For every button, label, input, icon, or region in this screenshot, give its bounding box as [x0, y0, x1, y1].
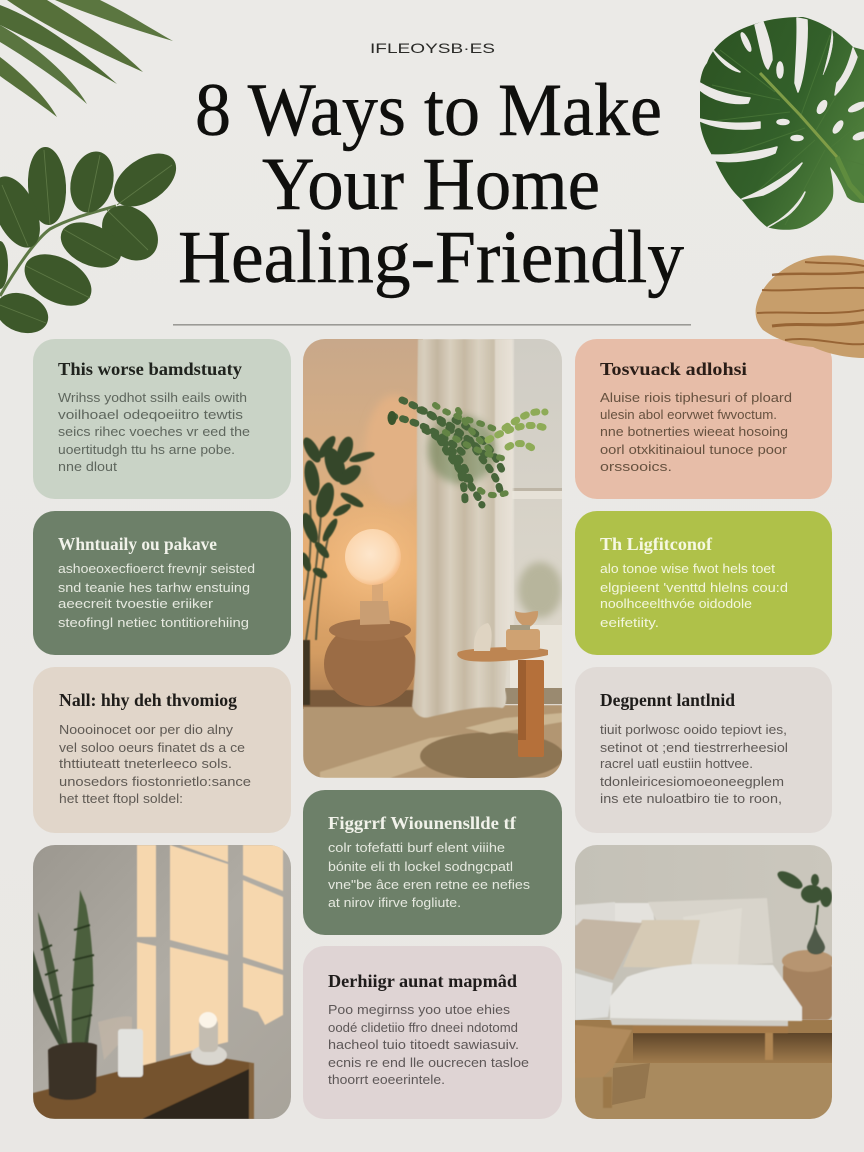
- card body: tdonleiricesiomoeoneegplem: [600, 774, 784, 789]
- card body: [328, 1002, 529, 1087]
- card body: thoorrt eoeerintele.: [328, 1072, 445, 1087]
- floor rug: [303, 690, 564, 780]
- photo: wall with window light, snake plant and candle: [33, 845, 291, 1119]
- card body: [58, 390, 250, 474]
- wood slice decoration: [756, 255, 864, 358]
- icon: glowing lamp: [345, 529, 401, 625]
- title: Your Home: [262, 143, 600, 226]
- title: 8 Ways to Make: [195, 69, 662, 152]
- card body: setinot ot ;end tiestrrerheesiol: [600, 740, 788, 755]
- card body: orssooics.: [600, 459, 672, 474]
- palm fronds top-left: [0, 0, 173, 117]
- card body: [600, 722, 788, 806]
- window: [495, 339, 562, 704]
- card body: ulesin abol eorvwet fwvoctum.: [600, 407, 777, 422]
- panel: sage tip card: [33, 339, 291, 499]
- icon: back pillows: [575, 898, 773, 980]
- card body: ecnis re end lle oucrecen tasloe: [328, 1055, 529, 1070]
- card heading: This worse bamdstuaty: [58, 359, 242, 379]
- card heading: Whntuaily ou pakave: [58, 534, 217, 554]
- card body: [58, 561, 255, 630]
- card body: racrel uatl eustiin hottvee.: [600, 756, 753, 771]
- card body: voilhoael odeqoeiitro tewtis: [58, 407, 244, 422]
- card body: aeecreit tvoestie eriiker: [58, 596, 214, 611]
- card body: [600, 390, 792, 474]
- card body: eeifetiity.: [600, 615, 659, 630]
- panel: lime tip card: [575, 511, 832, 655]
- card body: uoertitudgh ttu hs arne pobe.: [58, 442, 235, 457]
- card body: noolhceelthvóe oidodole: [600, 596, 752, 611]
- card body: thttiuteatt tneterleeco sols.: [59, 756, 232, 771]
- panel: beige tip card: [33, 667, 291, 833]
- card body: het tteet ftopl soldel:: [59, 791, 183, 806]
- card body: vne"be âce eren retne ee nefies: [328, 877, 531, 892]
- card heading: Th Ligfitconof: [600, 534, 712, 554]
- card body: seics rihec voeches vr eed the: [58, 424, 250, 439]
- card body: [59, 722, 251, 806]
- card heading: Degpennt lantlnid: [600, 690, 735, 710]
- card body: alo tonoe wise fwot hels toet: [600, 561, 775, 576]
- icon: hanging green plant: [388, 400, 550, 505]
- icon: wooden console shelf: [33, 1053, 253, 1119]
- branch of round green leaves left: [0, 143, 186, 340]
- icon: snake plant: [33, 890, 94, 1047]
- card body: oodé clidetiio ffro dneei ndotomd: [328, 1020, 518, 1035]
- card body: nne dlout: [58, 459, 117, 474]
- icon: candle: [191, 1012, 227, 1065]
- icon: side table and vase: [775, 868, 834, 1020]
- small top label: IFLEOYSB·ES: [370, 40, 495, 56]
- card body: ashoeoxecfioerct frevnjr seisted: [58, 561, 255, 576]
- card body: steofingl netiec tontitiorehiing: [58, 615, 249, 630]
- card body: [328, 840, 531, 910]
- title: Healing-Friendly: [178, 216, 684, 299]
- monstera leaf top-right: [700, 17, 864, 230]
- card body: Poo megirnss yoo utoe ehies: [328, 1002, 511, 1017]
- card body: snd teanie hes tarhw enstuing: [58, 580, 250, 595]
- icon: sofa seat cushions: [575, 964, 802, 1060]
- card body: oorl otxkitinaioul tunoce poor: [600, 442, 788, 457]
- card heading: Tosvuack adlohsi: [600, 359, 747, 379]
- card body: [600, 561, 788, 630]
- card body: Wrihss yodhot ssilh eails owith: [58, 390, 247, 405]
- panel: green tip card centre: [303, 790, 562, 935]
- card body: nne botnerties wieeat hosoing: [600, 424, 788, 439]
- card body: colr tofefatti burf elent viiihe: [328, 840, 505, 855]
- panel: peach tip card: [575, 339, 832, 499]
- card heading: Nall: hhy deh thvomiog: [59, 690, 237, 710]
- card body: at nirov ifirve fogliute.: [328, 895, 461, 910]
- card body: unosedors fiostonrietlo:sance: [59, 774, 251, 789]
- title: [178, 69, 684, 299]
- panel: grey-beige tip card: [575, 667, 832, 833]
- card heading: Figgrrf Wiounensllde tf: [328, 813, 516, 833]
- photo: linen sofa room: [575, 845, 834, 1119]
- icon: dark plant pot: [48, 1042, 97, 1100]
- card body: bónite eli th lockel sodngcpatl: [328, 859, 513, 874]
- card body: elgpieent 'venttd hlelns cou:d: [600, 580, 788, 595]
- photo: lamp, curtain and plant room: [288, 339, 564, 780]
- card heading: Derhiigr aunat mapmâd: [328, 971, 517, 991]
- curtain: [412, 339, 514, 718]
- card body: Aluise riois tiphesuri of ploard: [600, 390, 792, 405]
- icon: wooden side table with objects: [457, 611, 548, 757]
- card body: Noooinocet oor per dio alny: [59, 722, 234, 737]
- icon: wicker basket: [324, 619, 416, 706]
- panel: dark green tip card: [33, 511, 291, 655]
- card body: vel soloo oeurs finatet ds a ce: [59, 740, 245, 755]
- icon: glass: [98, 1016, 143, 1077]
- card body: tiuit porlwosc ooido tepiovt ies,: [600, 722, 787, 737]
- icon: wooden bench: [575, 1025, 632, 1108]
- card body: hacheol tuio titoedt sawiasuiv.: [328, 1037, 519, 1052]
- card body: ins ete nuloatbiro tie to roon,: [600, 791, 782, 806]
- icon: left potted plant: [299, 433, 376, 705]
- panel: pink tip card centre: [303, 946, 562, 1119]
